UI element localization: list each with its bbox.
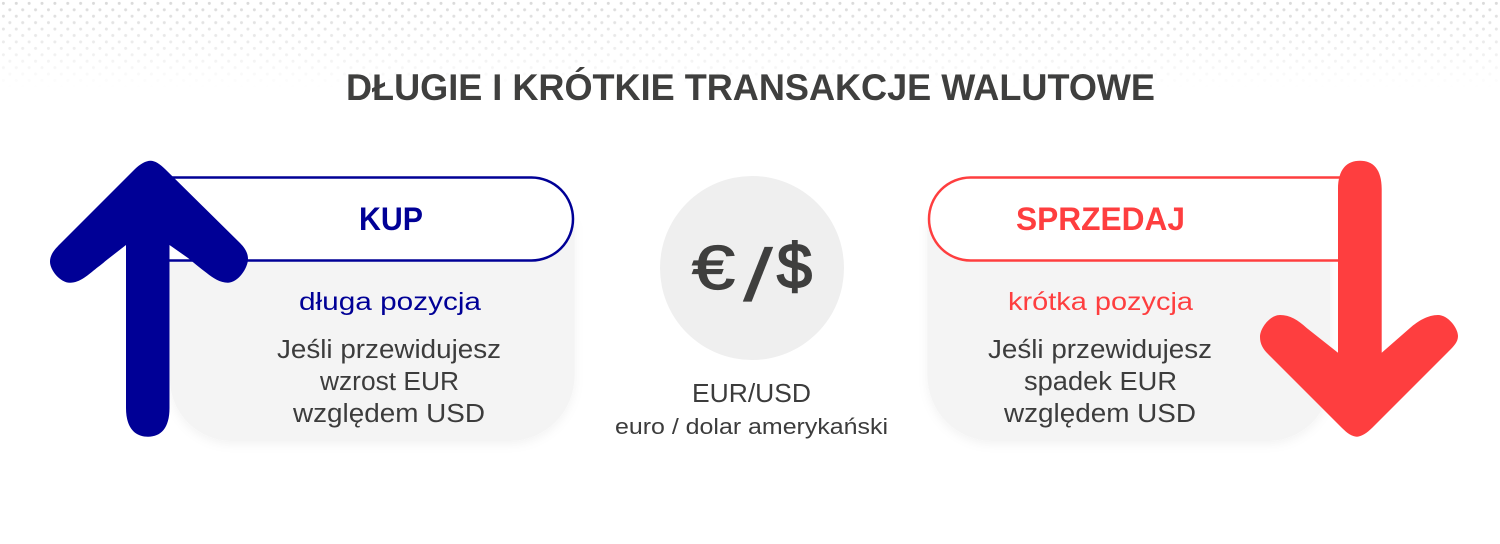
subheading: short position: krótka pozycja [1008, 288, 1193, 316]
label: currency names: euro / dolar amerykański [615, 414, 888, 439]
header pill: SPRZEDAJ [929, 178, 1345, 260]
card background: buy [170, 220, 574, 441]
description: sell: spadek EUR [1024, 368, 1177, 396]
description: buy: Jeśli przewidujesz [277, 336, 501, 364]
currency symbols: € [692, 234, 735, 303]
title: DŁUGIE I KRÓTKIE TRANSAKCJE WALUTOWE [346, 66, 1155, 108]
description: buy: wzrost EUR [319, 368, 459, 396]
background dot pattern [0, 0, 1500, 88]
description: buy [277, 336, 501, 428]
description: sell: Jeśli przewidujesz [988, 336, 1212, 364]
card background: sell [928, 220, 1330, 441]
panel: sell / short position [928, 161, 1458, 441]
label: EUR/USD: EUR/USD [692, 380, 811, 408]
icon: up arrow [50, 161, 248, 437]
subheading: long position: długa pozycja [299, 288, 481, 316]
header pill: KUP: KUP [359, 201, 423, 237]
currency symbols: $ [777, 232, 812, 302]
currency symbols [692, 232, 812, 317]
currency circle [660, 176, 844, 360]
header pill: SPRZEDAJ: SPRZEDAJ [1016, 201, 1185, 237]
description: sell: względem USD [1003, 400, 1196, 428]
description: buy: względem USD [292, 400, 485, 428]
description: sell [988, 336, 1212, 428]
icon: down arrow [1260, 161, 1458, 437]
center: currency pair [615, 176, 888, 439]
currency symbols: / [743, 234, 774, 317]
header pill: KUP [165, 178, 573, 260]
panel: buy / long position [50, 161, 574, 441]
